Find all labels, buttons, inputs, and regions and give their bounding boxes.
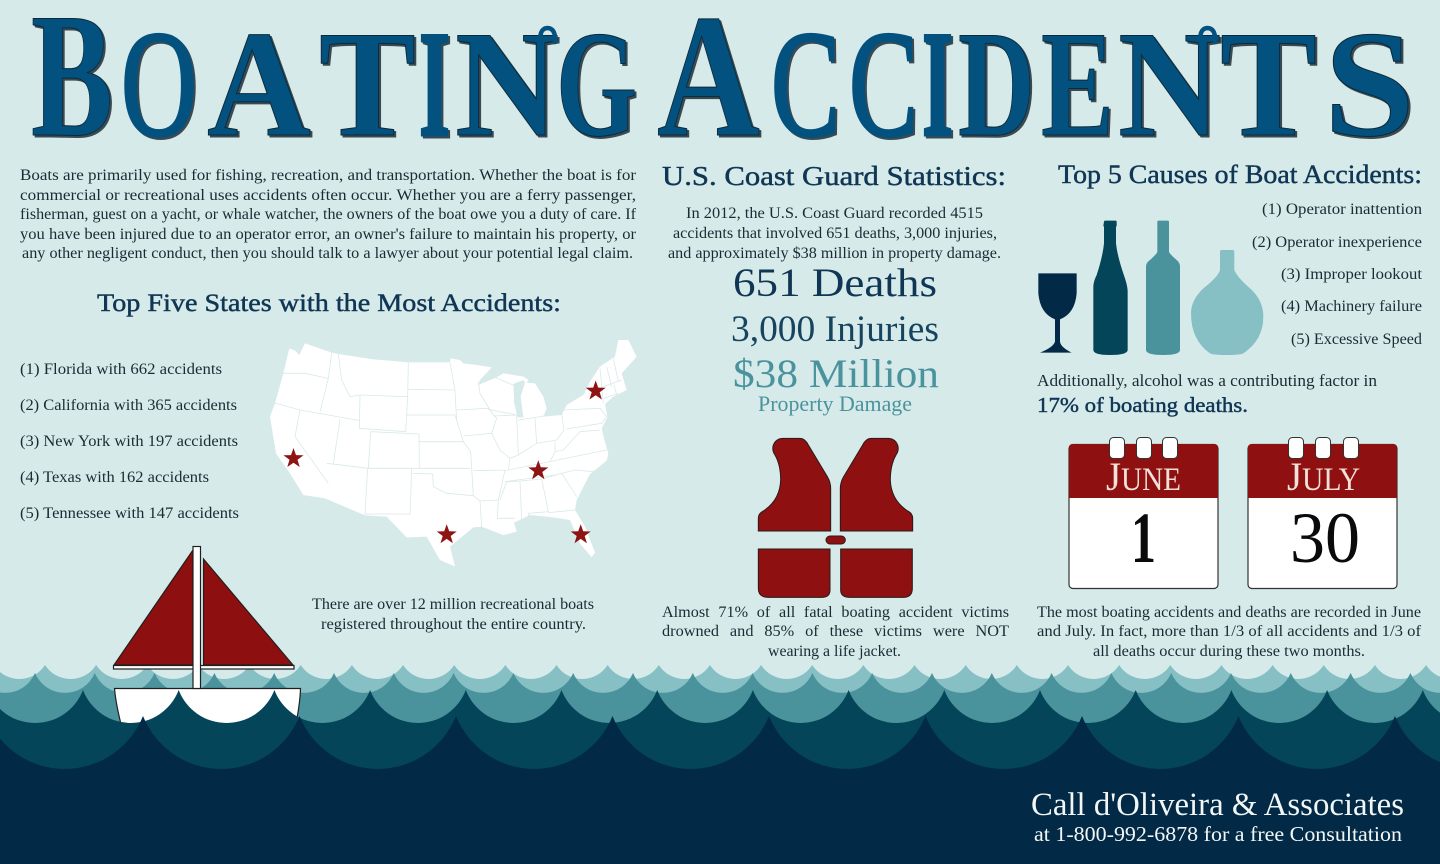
calendar rings xyxy=(1288,438,1358,458)
calendar header xyxy=(1069,444,1218,498)
text: coast guard summary xyxy=(668,205,1001,262)
star: Tennessee xyxy=(528,460,548,479)
list: top 5 causes: (4) Machinery failure xyxy=(1281,298,1422,315)
heading: top 5 causes: Top 5 Causes of Boat Accidents: xyxy=(1058,160,1422,189)
stat: property damage label: Property Damage xyxy=(758,391,912,416)
list: top 5 causes: (3) Improper lookout xyxy=(1281,266,1423,283)
title: T xyxy=(319,0,416,168)
month: July: J xyxy=(1287,454,1302,499)
text: alcohol factor: Additionally, alcohol was a contributing factor in xyxy=(1037,371,1377,390)
star: California xyxy=(283,448,303,467)
title flourishes on the letter N xyxy=(540,28,1215,46)
text: recreational boats: There are over 12 million recreational boats xyxy=(312,596,594,613)
intro paragraph xyxy=(20,167,637,262)
text: June and July statistic: all deaths occur during these two months. xyxy=(1093,643,1365,660)
intro paragraph: commercial or recreational uses accidents often occur. Whether you are a ferry passenger, xyxy=(20,187,636,204)
list: top five states: (1) Florida with 662 accidents xyxy=(20,361,222,378)
calendar: July 30 xyxy=(1248,438,1397,588)
footer: firm name: Call d'Oliveira & Associates xyxy=(1031,787,1404,823)
icon: wine bottle xyxy=(1146,221,1180,355)
intro paragraph: Boats are primarily used for fishing, recreation, and transportation. Whether the boat is for xyxy=(20,167,637,184)
sailboat: left sail xyxy=(114,550,193,665)
text: June and July statistic: and July. In fact, more than 1/3 of all accidents and 1/3 of xyxy=(1037,623,1422,640)
title: N xyxy=(455,0,559,168)
text: June and July statistic xyxy=(1037,604,1422,660)
stat: injuries: 3,000 Injuries xyxy=(731,309,939,350)
title: I xyxy=(419,0,450,168)
list: top five states: (2) California with 365 accidents xyxy=(20,397,237,414)
text: coast guard summary: In 2012, the U.S. Coast Guard recorded 4515 xyxy=(686,205,983,222)
text: life jacket statistic: Almost 71% of all fatal boating accident victims xyxy=(662,604,1009,621)
icon: jug xyxy=(1191,250,1263,355)
text: recreational boats xyxy=(312,596,594,633)
wave: lightest layer xyxy=(0,665,1440,864)
footer call to action xyxy=(1031,787,1404,846)
sailboat: mast xyxy=(193,546,200,688)
map: United States xyxy=(270,340,637,567)
list: top 5 causes: (2) Operator inexperience xyxy=(1252,234,1422,251)
month: June: UNE xyxy=(1121,462,1181,498)
footer: phone number: at 1-800-992-6878 for a free Consultation xyxy=(1034,822,1403,846)
calendar: June 1 xyxy=(1069,438,1218,588)
list: top five states: (4) Texas with 162 accidents xyxy=(20,469,209,486)
icon: tall bottle xyxy=(1093,221,1128,355)
icon: life jacket xyxy=(758,438,913,597)
date: 30: 30 xyxy=(1290,498,1360,578)
wave: third layer xyxy=(0,690,1440,864)
date: 1: 1 xyxy=(1131,498,1156,578)
heading: coast guard statistics: U.S. Coast Guard Statistics: xyxy=(662,161,1006,191)
star: Florida xyxy=(571,524,591,543)
title: D xyxy=(958,0,1035,168)
star: New York xyxy=(586,380,606,399)
wave: second layer xyxy=(0,673,1440,864)
title: S xyxy=(1324,0,1415,168)
stat: deaths: 651 Deaths xyxy=(733,260,937,305)
title: E xyxy=(1041,0,1114,168)
title: N xyxy=(1118,0,1221,168)
title: I xyxy=(922,0,953,168)
month: July: ULY xyxy=(1302,462,1360,498)
text: life jacket statistic xyxy=(662,604,1010,660)
intro paragraph: any other negligent conduct, then you should talk to a lawyer about your potential legal claim. xyxy=(22,245,633,262)
text: coast guard summary: and approximately $38 million in property damage. xyxy=(668,245,1001,262)
sailboat xyxy=(114,546,300,728)
title: C xyxy=(849,0,918,168)
intro paragraph: fisherman, guest on a yacht, or whale watcher, the owners of the boat owe you a duty of care. If xyxy=(20,206,637,223)
title: O xyxy=(121,0,197,168)
icon: wine glass xyxy=(1038,273,1077,353)
list: top 5 causes: (1) Operator inattention xyxy=(1262,201,1422,218)
stat: property damage amount: $38 Million xyxy=(733,351,939,396)
list: top five states xyxy=(20,361,239,522)
list: top 5 causes xyxy=(1252,201,1423,348)
text: recreational boats: registered throughout the entire country. xyxy=(321,616,586,633)
text: June and July statistic: The most boating accidents and deaths are recorded in June xyxy=(1037,604,1421,621)
list: top five states: (3) New York with 197 accidents xyxy=(20,433,238,450)
title: G xyxy=(556,0,637,168)
sailboat: right sail xyxy=(204,559,293,665)
list: top five states: (5) Tennessee with 147 accidents xyxy=(20,505,239,522)
title: T xyxy=(1220,0,1317,168)
map: Lake Michigan xyxy=(513,380,525,417)
intro paragraph: you have been injured due to an operator error, an owner's failure to maintain his property, or xyxy=(20,226,637,243)
text: life jacket statistic: wearing a life jacket. xyxy=(768,643,901,660)
calendar rings xyxy=(1110,438,1178,458)
sailboat: boom xyxy=(114,666,294,669)
text: 17% of boating deaths: 17% of boating deaths. xyxy=(1037,393,1248,417)
star: Texas xyxy=(437,524,457,543)
map: state borders xyxy=(273,353,622,527)
calendar page xyxy=(1248,444,1397,588)
wave: darkest layer xyxy=(0,716,1440,864)
icons: alcohol bottles xyxy=(1038,221,1263,355)
title: A xyxy=(207,0,311,168)
month: June: J xyxy=(1106,454,1121,499)
text: life jacket statistic: drowned and 85% of these victims were NOT xyxy=(662,623,1010,640)
heading: top five states: Top Five States with the Most Accidents: xyxy=(97,290,561,317)
map: land outline xyxy=(270,340,637,567)
map: stars xyxy=(283,380,606,543)
calendar page xyxy=(1069,444,1218,588)
text: coast guard summary: accidents that involved 651 deaths, 3,000 injuries, xyxy=(673,225,997,242)
calendar header xyxy=(1248,444,1397,498)
title: C xyxy=(771,0,840,168)
sailboat: hull xyxy=(114,688,300,728)
list: top 5 causes: (5) Excessive Speed xyxy=(1291,331,1422,348)
